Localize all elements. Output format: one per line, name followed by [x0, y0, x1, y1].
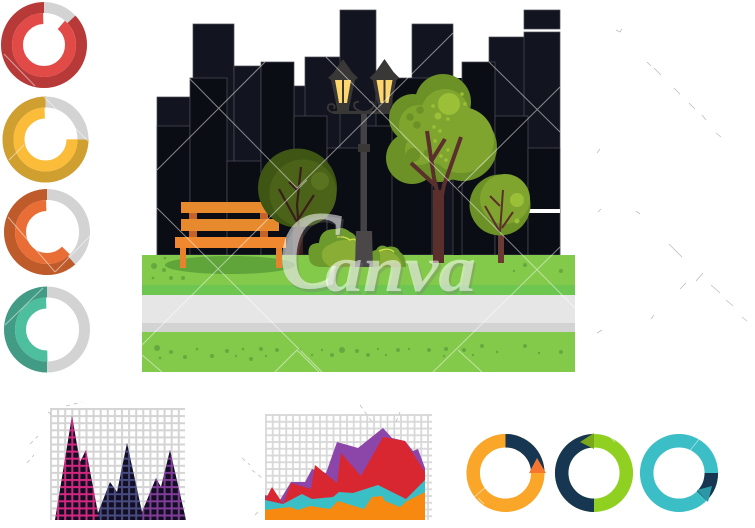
Canva watermark: C [279, 189, 342, 313]
dark background tree [258, 148, 337, 255]
street lamp [328, 59, 401, 267]
donut: yellow 75 percent [8, 102, 83, 177]
donut: teal 50 percent [10, 292, 84, 367]
stacked area chart [265, 414, 432, 520]
bushes [308, 228, 406, 267]
donut: green with navy [562, 433, 626, 505]
Canva watermark: anva [325, 233, 476, 306]
lantern right [370, 59, 400, 113]
large green tree [386, 74, 497, 263]
donut: orange 62 percent [10, 194, 84, 270]
area chart: spiked peaks [50, 408, 186, 520]
small green tree [470, 174, 530, 263]
donut: teal with navy [647, 441, 712, 505]
Canva watermark: C [281, 192, 344, 316]
lantern left [328, 59, 358, 113]
Canva watermark: anva [327, 236, 478, 309]
Canva watermark [279, 189, 478, 316]
ground and path [142, 255, 575, 372]
donut: red 87 percent [6, 8, 82, 82]
bench [165, 202, 295, 274]
donut: orange with navy [473, 441, 546, 505]
city skyline [157, 10, 560, 257]
